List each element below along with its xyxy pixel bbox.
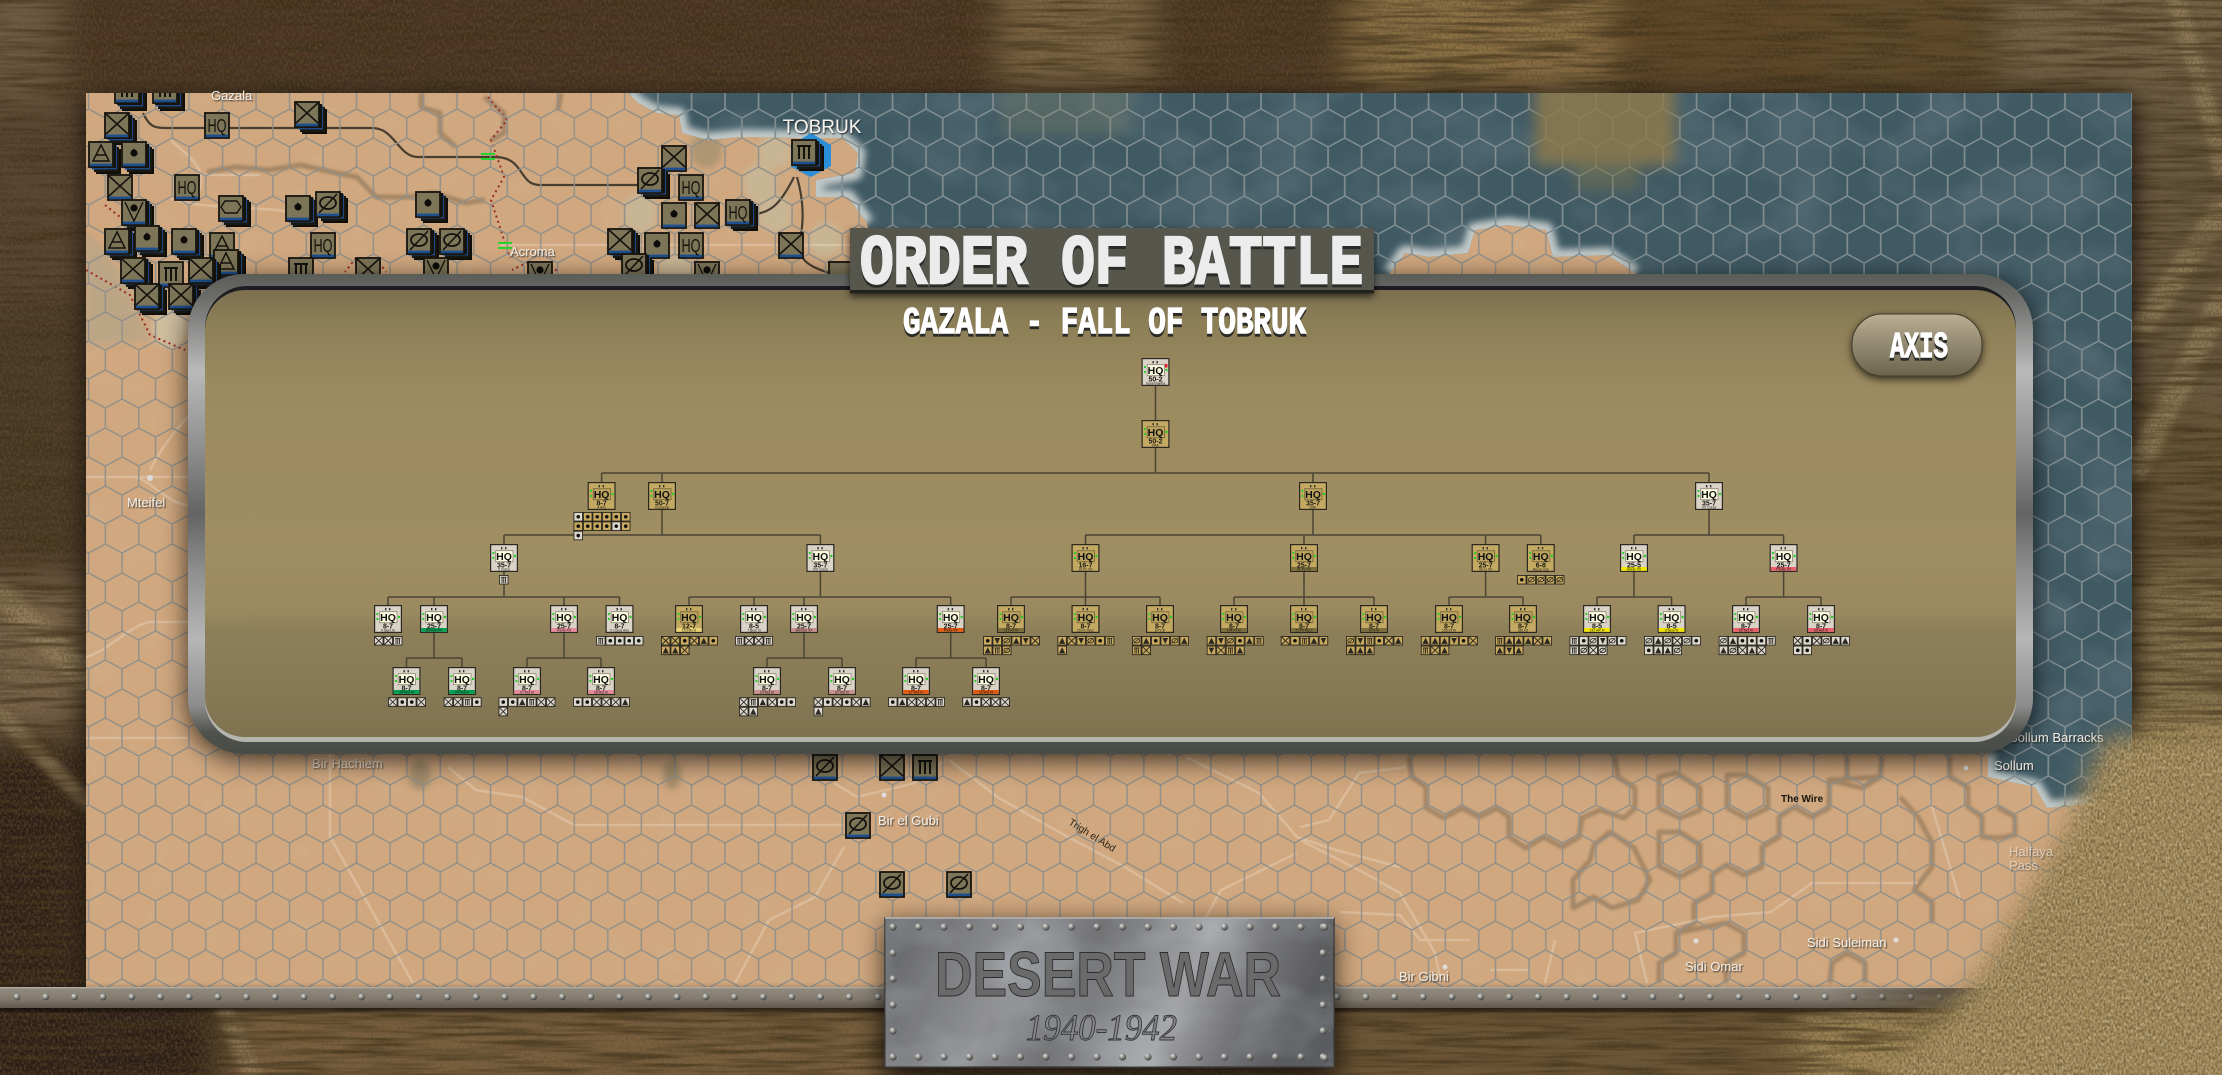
logo text: years: 1940-1942 <box>1026 1008 1177 1049</box>
node: Brescia: Brescia XX <box>426 629 443 633</box>
node: Brescia regiment 19: HQ <box>399 674 414 686</box>
node: X Corps artillery: 8-7 <box>614 623 625 630</box>
node: 90 Lt: HQ <box>1478 551 1493 563</box>
node: 361 Inf: HQ <box>1515 612 1531 624</box>
units: Pavia regiment 28 <box>573 697 630 707</box>
node: 15 Pz: HQ <box>1078 551 1093 563</box>
node: X Bers: HQ <box>380 612 396 624</box>
node: Pavia XXI: 25-7 <box>944 623 958 630</box>
node: Brescia XXI <box>790 605 818 633</box>
node: 8 Pz <box>1146 605 1174 633</box>
node: Brescia XXI regiment 20 <box>828 667 856 695</box>
node: X Corps artillery: X Corps Arty <box>610 629 629 633</box>
node: Pavia XXI regiment 27: HQ <box>908 674 924 686</box>
map counters: units around Gazala and Tobruk: HQ <box>208 116 226 136</box>
map place names <box>127 88 2104 984</box>
units: Brescia regiment 20 <box>444 697 482 707</box>
node: PAA: HQ <box>1148 427 1163 439</box>
units: 155 Inf <box>1421 636 1478 655</box>
node: Brescia regiment 20: 20 Mot III <box>455 691 469 695</box>
node: Pavia XXI regiment 28: 8-7 <box>981 685 991 692</box>
node: 5 Pz: 8-7 <box>1369 623 1379 630</box>
map place names: Bir Gibni <box>1399 969 1449 984</box>
units: Pavia regiment 27 <box>498 697 556 716</box>
units: Pavia XXI regiment 28 <box>962 697 1010 707</box>
node: 15 Infantry: 12-7 <box>682 623 696 630</box>
node: 65 Mot: HQ <box>1738 612 1754 624</box>
map place names: Sollum Barracks <box>2009 730 2104 745</box>
node: 8 Pz: HQ <box>1152 612 1168 624</box>
order of battle tree connectors <box>388 386 1821 667</box>
node: XXI Corps: 35-7 <box>813 562 828 569</box>
node: 5 Pz <box>1360 605 1388 633</box>
node: X Bers <box>374 605 402 633</box>
node: Pavia: HQ <box>556 612 572 624</box>
node: X Corps: X Corps <box>498 568 510 572</box>
node: XX Corps: 35-7 <box>1702 500 1716 507</box>
units: X Bers <box>374 636 402 646</box>
node: Brescia XXI regiment 20: 20 Mot III <box>835 691 849 695</box>
units: X Corps <box>499 575 508 584</box>
node: 155 Inf: HQ <box>1441 612 1457 624</box>
button: Axis: AXIS <box>1890 327 1948 368</box>
units: 65 Mot <box>1719 636 1776 655</box>
map counters: units around Gazala and Tobruk: HQ <box>728 203 748 223</box>
node: 132 AR: HQ <box>1589 612 1605 624</box>
node: 7 Bers: HQ <box>746 612 762 624</box>
node: Comando <box>648 482 676 510</box>
node: 104 Pz <box>1220 605 1248 633</box>
node: 155 Inf <box>1435 605 1463 633</box>
node: 115 Inf <box>997 605 1025 633</box>
units: Recce Group <box>1517 575 1564 584</box>
units: 8 Bers <box>1644 636 1701 655</box>
terrain: ridges and escarpments <box>207 93 2015 983</box>
node: 104 Pz: 104 Pz III <box>1227 629 1241 633</box>
node: Pavia regiment 27: HQ <box>519 674 535 686</box>
node: Comando: Comando <box>655 506 669 510</box>
node: Ariete <box>1620 544 1648 572</box>
map place names: TOBRUK <box>783 117 862 138</box>
units: Brescia XXI regiment 19 <box>739 697 796 716</box>
title plate <box>850 226 1374 305</box>
node: Ariete: 25-5 <box>1627 562 1641 569</box>
node: 8 Pz: 8 Pz III <box>1155 629 1165 633</box>
node: 5 Pz: 5 Pz III <box>1369 629 1379 633</box>
button: Axis <box>1852 314 1982 376</box>
heading: Order of Battle: ORDER OF BATTLE <box>860 226 1363 305</box>
node: 21 Pz Recce: 21 Pz Recc <box>1295 629 1313 633</box>
node: 21 Pz Recce: HQ <box>1296 612 1312 624</box>
node: 104 Pz: 8-7 <box>1229 623 1239 630</box>
map place names: The Wire <box>1781 794 1824 805</box>
units: 132 AR <box>1570 636 1626 655</box>
node: Brescia regiment 19 <box>392 667 420 695</box>
node: 21 Pz: 21 Pz XX <box>1297 568 1312 572</box>
node: Trieste: 25-7 <box>1777 562 1791 569</box>
node: Brescia regiment 20: HQ <box>454 674 470 686</box>
node: 8 Pz: 8-7 <box>1155 623 1165 630</box>
node: XXI Corps <box>806 544 834 572</box>
node: DAK: 35-7 <box>1306 500 1320 507</box>
units: Brescia XXI regiment 20 <box>814 697 871 716</box>
terrain: rocky hexes <box>86 132 841 790</box>
node: Brescia XXI regiment 20: HQ <box>834 674 850 686</box>
node: Brescia regiment 19: 19 Mot III <box>399 691 414 695</box>
node: 15 Infantry <box>675 605 703 633</box>
node: 15 Pz Recce <box>1072 605 1100 633</box>
units: Pavia XXI regiment 27 <box>888 697 945 707</box>
node: Brescia <box>420 605 448 633</box>
node: 21 Pz <box>1290 544 1318 572</box>
node: X Corps: 35-7 <box>497 562 511 569</box>
node: X Corps artillery <box>606 605 634 633</box>
map place names: Sidi Omar <box>1685 959 1743 974</box>
map place names: Bir Hachiem <box>312 756 383 771</box>
node: 15 Pz <box>1072 544 1100 572</box>
node: 90 Lt: 25-7 <box>1479 562 1493 569</box>
node: Pavia XXI: Pavia XX <box>944 629 958 633</box>
map counters: units around Gazala and Tobruk: HQ <box>178 178 196 198</box>
units: X Corps artillery <box>596 636 644 646</box>
units: 15 Pz Recce <box>1057 636 1114 655</box>
node: 132 AR <box>1583 605 1611 633</box>
node: X Corps: HQ <box>496 551 512 563</box>
sand fading over the lower-right corner of the map: Pass <box>2009 858 2038 873</box>
hex grid <box>86 93 2132 988</box>
node: 65 Mot: 65 Mot III <box>1739 629 1753 633</box>
node: 21 Pz: HQ <box>1296 551 1312 563</box>
panel: order of battle <box>188 226 2033 754</box>
node: 361 Inf: 361 Inf <box>1518 629 1528 633</box>
node: Supreme HQ: HQ <box>1148 365 1163 377</box>
node: Army artillery: 8-7 <box>597 500 607 507</box>
node: 15 Pz: 15 Pz XX <box>1078 568 1093 572</box>
subtitle: scenario name: GAZALA - FALL OF TOBRUK <box>903 302 1306 345</box>
node: 7 Bers <box>740 605 768 633</box>
node: DAK <box>1299 482 1327 510</box>
map place names: Trigh el Abd <box>1066 817 1117 855</box>
metal strip with rivets <box>0 987 2030 1008</box>
units: Army artillery <box>574 512 630 540</box>
node: Brescia: 25-7 <box>427 623 441 630</box>
node: Pavia XXI <box>937 605 965 633</box>
node: 7 Bers: 7 Bers III <box>747 629 761 633</box>
node: XXI Corps: HQ <box>813 551 828 563</box>
node: Pavia XXI regiment 27 <box>902 667 930 695</box>
node: Brescia XXI regiment 19 <box>753 667 781 695</box>
node: 8 Bers: 8-5 <box>1667 623 1677 630</box>
node: Brescia XXI regiment 19: 8-7 <box>762 685 772 692</box>
node: 5 Pz: HQ <box>1366 612 1382 624</box>
units: 66 Mot <box>1793 636 1850 655</box>
units: 104 Pz <box>1207 636 1264 655</box>
node: Pavia XXI regiment 27: 27 Mot III <box>909 691 923 695</box>
node: X Bers: 8-7 <box>383 623 393 630</box>
node: 361 Inf: 8-7 <box>1518 623 1528 630</box>
sea and coast <box>628 93 2132 808</box>
node: Recce Group <box>1527 544 1555 572</box>
node: Brescia XXI: HQ <box>796 612 812 624</box>
node: 15 Pz: 16-7 <box>1078 562 1093 569</box>
node: 115 Inf: 115 Inf III <box>1004 629 1018 633</box>
node: 132 AR: 132 AR III <box>1590 629 1605 633</box>
node: 115 Inf: HQ <box>1003 612 1019 624</box>
node: Supreme HQ <box>1142 358 1170 386</box>
node: 8 Bers: 8 Bers III <box>1665 629 1678 633</box>
node: Brescia: HQ <box>426 612 442 624</box>
units: 21 Pz Recce <box>1281 636 1328 646</box>
node: Pavia regiment 27: 8-7 <box>522 685 532 692</box>
sand fading over the lower-right corner of the map: Halfaya <box>2009 844 2054 859</box>
map place names: Sollum <box>1994 758 2034 773</box>
node: XX Corps: HQ <box>1701 489 1717 501</box>
node: Pavia: 25-7 <box>557 623 571 630</box>
node: Pavia XXI regiment 28 <box>972 667 1000 695</box>
map counters: units around Gazala and Tobruk: HQ <box>682 178 700 198</box>
node: XX Corps <box>1695 482 1723 510</box>
node: Brescia XXI: 25-7 <box>797 623 811 630</box>
units: 7 Bers <box>735 636 773 646</box>
node: 66 Mot: 8-7 <box>1816 623 1826 630</box>
node: 21 Pz Recce: 8-7 <box>1299 623 1309 630</box>
roads and tracks <box>86 140 1960 983</box>
node: Pavia regiment 28: 28 Mot III <box>594 691 608 695</box>
units: 15 Infantry <box>661 636 718 655</box>
node: 66 Mot: HQ <box>1813 612 1829 624</box>
node: 361 Inf <box>1509 605 1537 633</box>
node: X Corps artillery: HQ <box>612 612 627 624</box>
node: 115 Inf: 8-7 <box>1006 623 1016 630</box>
node: Pavia regiment 27: 27 Mot III <box>520 691 534 695</box>
node: 15 Pz Recce: 8-7 <box>1080 623 1091 630</box>
node: Pavia regiment 28: HQ <box>593 674 609 686</box>
node: 65 Mot <box>1732 605 1760 633</box>
node: Recce Group: 6-8 <box>1536 562 1546 569</box>
node: 155 Inf: 8-7 <box>1444 623 1454 630</box>
node: Brescia XXI: Brescia XX <box>796 629 813 633</box>
map counters: units around Gazala and Tobruk: HQ <box>682 236 700 256</box>
node: 8 Bers: HQ <box>1664 612 1679 624</box>
node: 15 Pz Recce: HQ <box>1078 612 1093 624</box>
units: 8 Pz <box>1132 636 1189 655</box>
node: Supreme HQ: 50-2 <box>1148 376 1163 383</box>
map counters: units around Gazala and Tobruk <box>89 78 971 897</box>
node: Trieste <box>1770 544 1798 572</box>
node: Pavia <box>550 605 578 633</box>
node: Brescia XXI regiment 19: HQ <box>759 674 775 686</box>
node: DAK: HQ <box>1305 489 1321 501</box>
node: DAK: DAK <box>1310 506 1317 510</box>
node: XX Corps: XX Corps <box>1702 506 1717 510</box>
burlap showing through the map <box>1000 80 1675 190</box>
map place names: Mteifel <box>127 495 165 510</box>
map place names: Sidi Suleiman <box>1807 935 1886 950</box>
node: 8 Bers <box>1658 605 1686 633</box>
units: 115 Inf <box>983 636 1040 655</box>
node: Comando: HQ <box>654 489 670 501</box>
map place names: Acroma <box>510 244 556 259</box>
node: Brescia regiment 20 <box>448 667 476 695</box>
node: Recce Group: HQ <box>1533 551 1549 563</box>
node: Pavia: Pavia XX <box>557 629 572 633</box>
node: 7 Bers: 8-5 <box>749 623 759 630</box>
node: Ariete: HQ <box>1626 551 1642 563</box>
units: Brescia regiment 19 <box>388 697 426 707</box>
node: Trieste: Trieste XX <box>1776 568 1792 572</box>
node: 15 Infantry: HQ <box>681 612 697 624</box>
node: Brescia XXI regiment 19: 19 Mot III <box>760 691 774 695</box>
node: 15 Pz Recce: 15 Pz Recc <box>1077 629 1094 633</box>
node: 66 Mot <box>1807 605 1835 633</box>
node: Pavia XXI: HQ <box>943 612 959 624</box>
units: 5 Pz <box>1346 636 1403 655</box>
node: 90 Lt: 90 Lt XX <box>1479 568 1493 572</box>
node: Ariete: Ariete XX <box>1627 568 1642 572</box>
node: 132 AR: 8-5 <box>1592 623 1602 630</box>
map counters: units around Gazala and Tobruk: HQ <box>314 236 332 256</box>
node: Pavia regiment 28: 8-7 <box>596 685 606 692</box>
node: Pavia XXI regiment 28: 28 Mot III <box>979 691 993 695</box>
node: Army artillery: HQ <box>594 489 609 501</box>
node: X Corps <box>490 544 518 572</box>
node: 21 Pz Recce <box>1290 605 1318 633</box>
node: PAA: 50-2 <box>1148 438 1163 445</box>
node: Brescia XXI regiment 20: 8-7 <box>837 685 847 692</box>
node: 65 Mot: 8-7 <box>1741 623 1751 630</box>
units: 361 Inf <box>1495 636 1552 655</box>
node: Supreme HQ: Supermarina <box>1146 382 1165 386</box>
node: Pavia XXI regiment 27: 8-7 <box>911 685 921 692</box>
node: Pavia XXI regiment 28: HQ <box>978 674 994 686</box>
node: Recce Group: Recce Grp <box>1533 568 1549 572</box>
node: 15 Infantry: 15 Infty X <box>682 629 697 633</box>
node: Brescia regiment 20: 8-7 <box>457 685 467 692</box>
map place names: Gazala <box>211 88 253 103</box>
node: 90 Lt <box>1472 544 1500 572</box>
node: Comando: 50-7 <box>655 500 669 507</box>
node: Army artillery <box>588 482 616 510</box>
node: Trieste: HQ <box>1776 551 1791 563</box>
node: XXI Corps: XXI Corps <box>813 568 828 572</box>
node: PAA <box>1142 420 1170 448</box>
node: Pavia regiment 27 <box>513 667 541 695</box>
node: X Bers: X Bers III <box>381 629 395 633</box>
node: PAA: PAA <box>1152 444 1159 448</box>
node: Army artillery: A Arty <box>597 506 606 510</box>
node: 155 Inf: 155 Inf III <box>1442 629 1456 633</box>
node: 66 Mot: 66 Mot III <box>1814 629 1828 633</box>
map place names: Bir el Gubi <box>878 813 939 828</box>
node: Pavia regiment 28 <box>587 667 615 695</box>
logo text: Desert War: DESERT WAR <box>935 940 1281 1010</box>
panel frame <box>188 274 2033 754</box>
node: Brescia regiment 19: 8-7 <box>401 685 412 692</box>
node: 21 Pz: 25-7 <box>1297 562 1311 569</box>
node: 104 Pz: HQ <box>1226 612 1242 624</box>
